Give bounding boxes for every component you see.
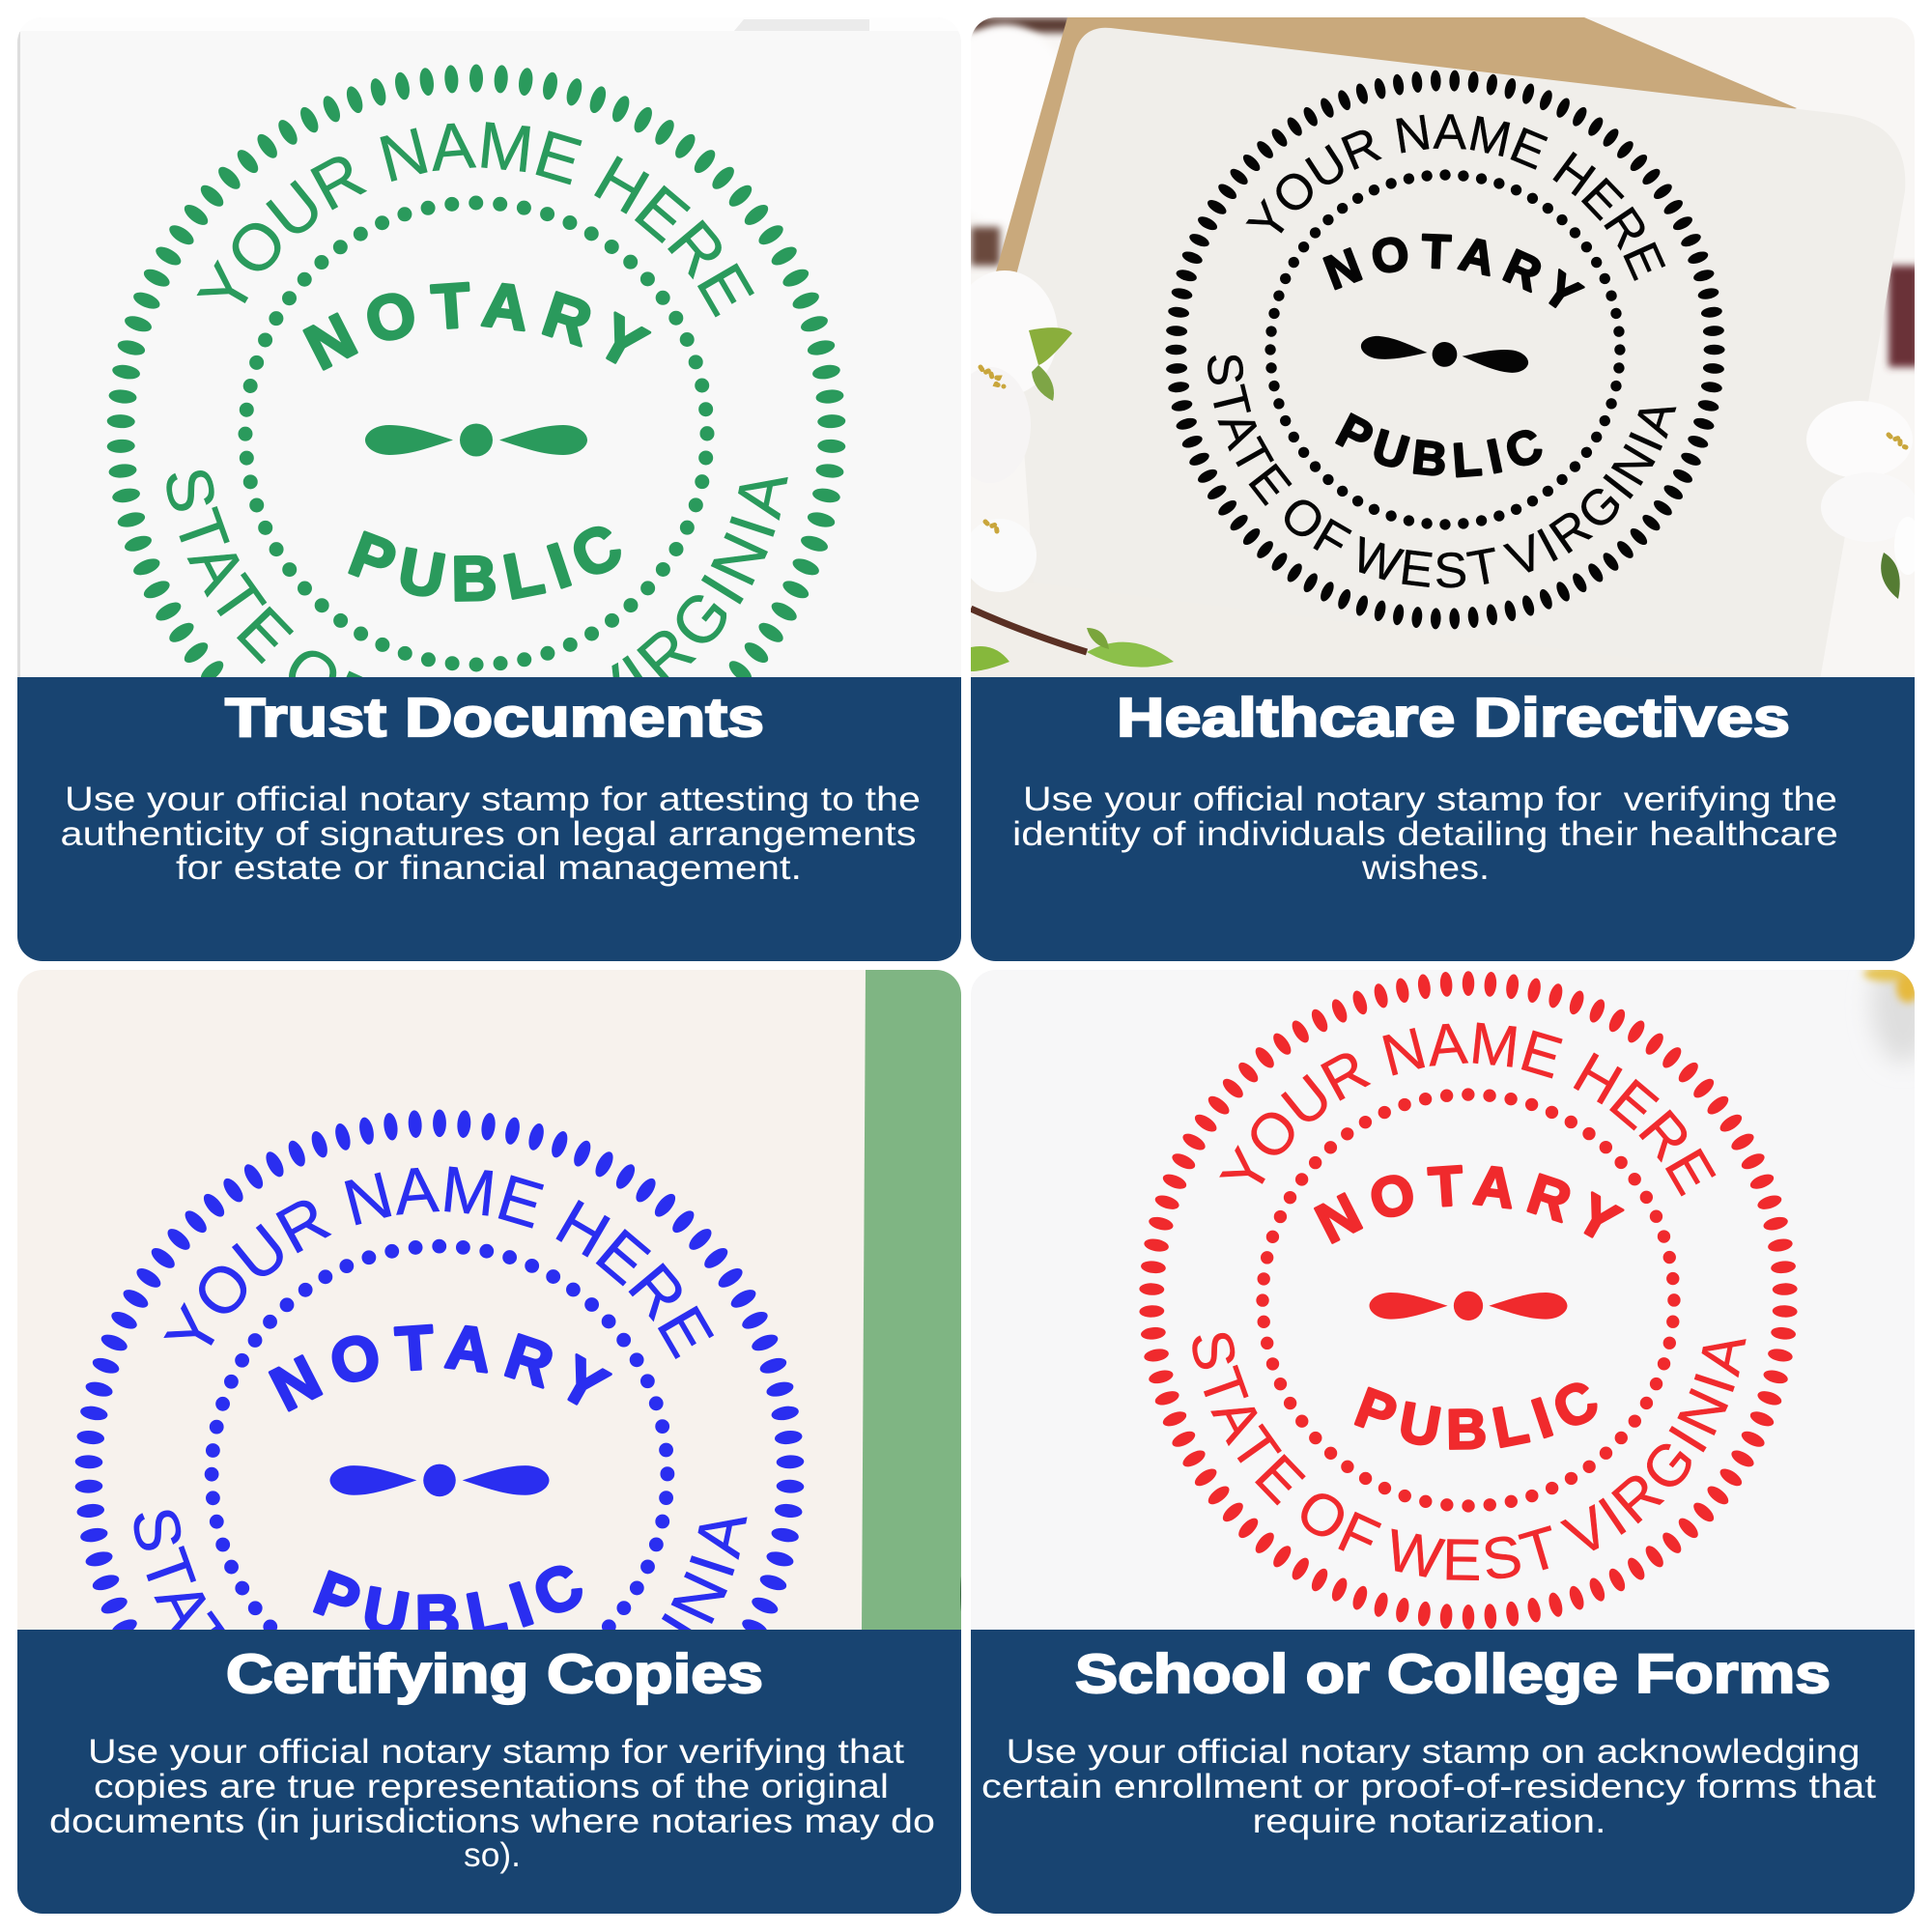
stamp: black notary seal: PUBLIC xyxy=(1335,412,1543,477)
text block: Use your official notary stamp on acknowledging xyxy=(1007,1733,1861,1771)
heading: Healthcare Directives xyxy=(1117,687,1790,749)
text block: identity of individuals detailing their healthcare xyxy=(1012,815,1838,853)
stamp: red notary seal: NOTARY xyxy=(1314,1165,1625,1244)
text block: certain enrollment or proof-of-residency forms that xyxy=(981,1768,1876,1805)
photo: card on kraft envelope with blossoms xyxy=(932,17,1921,680)
text block: so). xyxy=(464,1836,521,1874)
stamp: black notary seal: STATE OF WEST VIRGINIA xyxy=(1208,355,1677,588)
text block xyxy=(49,1733,935,1874)
panel: certifying copies xyxy=(17,970,961,1914)
stamp: red notary seal xyxy=(1139,971,1798,1630)
text block: copies are true representations of the original xyxy=(94,1768,889,1805)
panel: trust documents xyxy=(17,19,961,961)
stamp: green notary seal: STATE OF WEST VIRGINIA xyxy=(166,470,788,677)
photo: white paper with yellow flower xyxy=(1845,970,1915,1089)
stamp: blue notary seal: PUBLIC xyxy=(313,1565,582,1630)
stamp: green notary seal: PUBLIC xyxy=(348,526,621,602)
stamp: black notary seal: NOTARY xyxy=(1322,234,1585,308)
heading: Certifying Copies xyxy=(226,1643,763,1705)
text block xyxy=(1014,786,1837,879)
stamp: blue notary seal: YOUR NAME HERE xyxy=(163,1167,715,1359)
text block: for estate or financial management. xyxy=(176,849,802,887)
text block: authenticity of signatures on legal arrangements xyxy=(60,815,917,853)
photo: cream paper on green xyxy=(17,970,968,1631)
stamp: blue notary seal xyxy=(75,1109,804,1630)
stamp: red notary seal: YOUR NAME HERE xyxy=(1219,1022,1716,1196)
stamp: blue notary seal: NOTARY xyxy=(269,1323,612,1412)
text block xyxy=(981,1733,1876,1840)
photo: white paper xyxy=(17,19,869,677)
text block: Use your official notary stamp for verifying the xyxy=(1023,781,1837,818)
caption panel xyxy=(971,1630,1915,1914)
stamp: black notary seal xyxy=(1165,70,1725,630)
text block: Use your official notary stamp for verifying that xyxy=(88,1733,904,1771)
stamp: red notary seal: PUBLIC xyxy=(1354,1382,1598,1450)
text block: wishes. xyxy=(1361,849,1490,887)
heading: School or College Forms xyxy=(1075,1643,1831,1705)
heading: Trust Documents xyxy=(225,687,764,749)
stamp: red notary seal: STATE OF WEST VIRGINIA xyxy=(1192,1333,1747,1580)
text block xyxy=(60,781,921,887)
text block: documents (in jurisdictions where notaries may do xyxy=(49,1803,935,1840)
text block: require notarization. xyxy=(1252,1803,1605,1840)
stamp: green notary seal: NOTARY xyxy=(302,282,651,371)
text block: Use your official notary stamp for attesting to the xyxy=(65,781,921,818)
stamp: black notary seal: YOUR NAME HERE xyxy=(1246,114,1665,281)
stamp: green notary seal: YOUR NAME HERE xyxy=(197,122,754,317)
caption panel xyxy=(17,677,961,961)
stamp: green notary seal xyxy=(106,64,846,677)
caption panel xyxy=(971,677,1915,961)
panel: healthcare directives xyxy=(971,17,1915,961)
panel: school or college forms xyxy=(971,970,1915,1914)
caption panel xyxy=(17,1630,961,1914)
stamp: blue notary seal: STATE OF WEST VIRGINIA xyxy=(133,1511,748,1630)
